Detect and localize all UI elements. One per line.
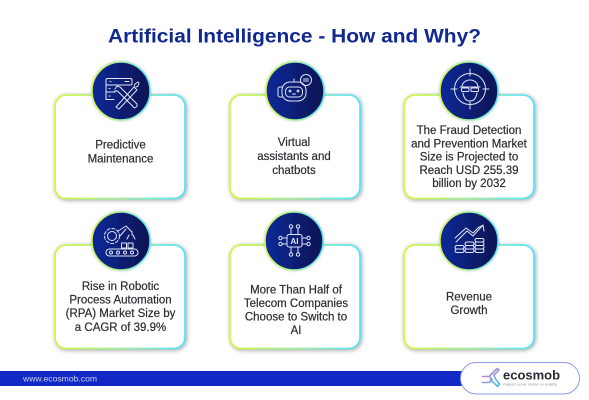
card text: Process Automation bbox=[69, 294, 172, 306]
icon badge: growth chart and coins bbox=[440, 212, 498, 270]
footer bar bbox=[0, 371, 470, 386]
card text: Size is Projected to bbox=[420, 152, 518, 164]
card outline bbox=[55, 245, 185, 348]
logo pill bbox=[460, 362, 580, 394]
card text: Maintenance bbox=[88, 154, 153, 166]
card text: assistants and bbox=[257, 151, 331, 163]
icon badge: robot arm and conveyor bbox=[92, 212, 150, 270]
card text: Growth bbox=[450, 305, 488, 317]
card outline bbox=[404, 95, 534, 198]
panel: predictive maintenance bbox=[55, 62, 185, 198]
website url: www.ecosmob.com bbox=[22, 374, 97, 384]
logo tagline: makes your vision a reality bbox=[503, 382, 557, 386]
card text: billion by 2032 bbox=[432, 178, 506, 190]
icon badge: fraud target bbox=[440, 62, 498, 120]
card outline bbox=[230, 95, 360, 198]
card text: More Than Half of bbox=[250, 284, 343, 296]
panel: telecom companies bbox=[230, 212, 360, 348]
card text: Rise in Robotic bbox=[82, 281, 159, 293]
card text: (RPA) Market Size by bbox=[66, 308, 176, 320]
logo wordmark: ecosmob bbox=[503, 368, 560, 382]
card text: a CAGR of 39.9% bbox=[75, 322, 166, 334]
card text: The Fraud Detection bbox=[417, 125, 521, 137]
title: Artificial Intelligence - How and Why? bbox=[108, 26, 481, 48]
icon badge: server and tools bbox=[92, 62, 150, 120]
card outline bbox=[404, 245, 534, 348]
panel: robotic process automation bbox=[55, 212, 185, 348]
card text: Virtual bbox=[278, 137, 310, 149]
card text: AI bbox=[291, 325, 301, 337]
icon badge: AI chip: AI bbox=[290, 237, 298, 246]
logo mark bbox=[482, 368, 500, 386]
card text: Choose to Switch to bbox=[245, 312, 347, 324]
panel: fraud detection bbox=[404, 62, 534, 198]
card outline bbox=[230, 245, 360, 348]
card text: and Prevention Market bbox=[411, 138, 528, 150]
card text: Telecom Companies bbox=[244, 298, 348, 310]
card outline bbox=[55, 95, 185, 198]
panel: virtual assistants bbox=[230, 62, 360, 198]
card text: Revenue bbox=[446, 292, 492, 304]
card text: chatbots bbox=[272, 165, 316, 177]
card text: Predictive bbox=[95, 140, 146, 152]
panel: revenue growth bbox=[404, 212, 534, 348]
card text: Reach USD 255.39 bbox=[419, 165, 519, 177]
icon badge: chatbot bbox=[266, 62, 324, 120]
